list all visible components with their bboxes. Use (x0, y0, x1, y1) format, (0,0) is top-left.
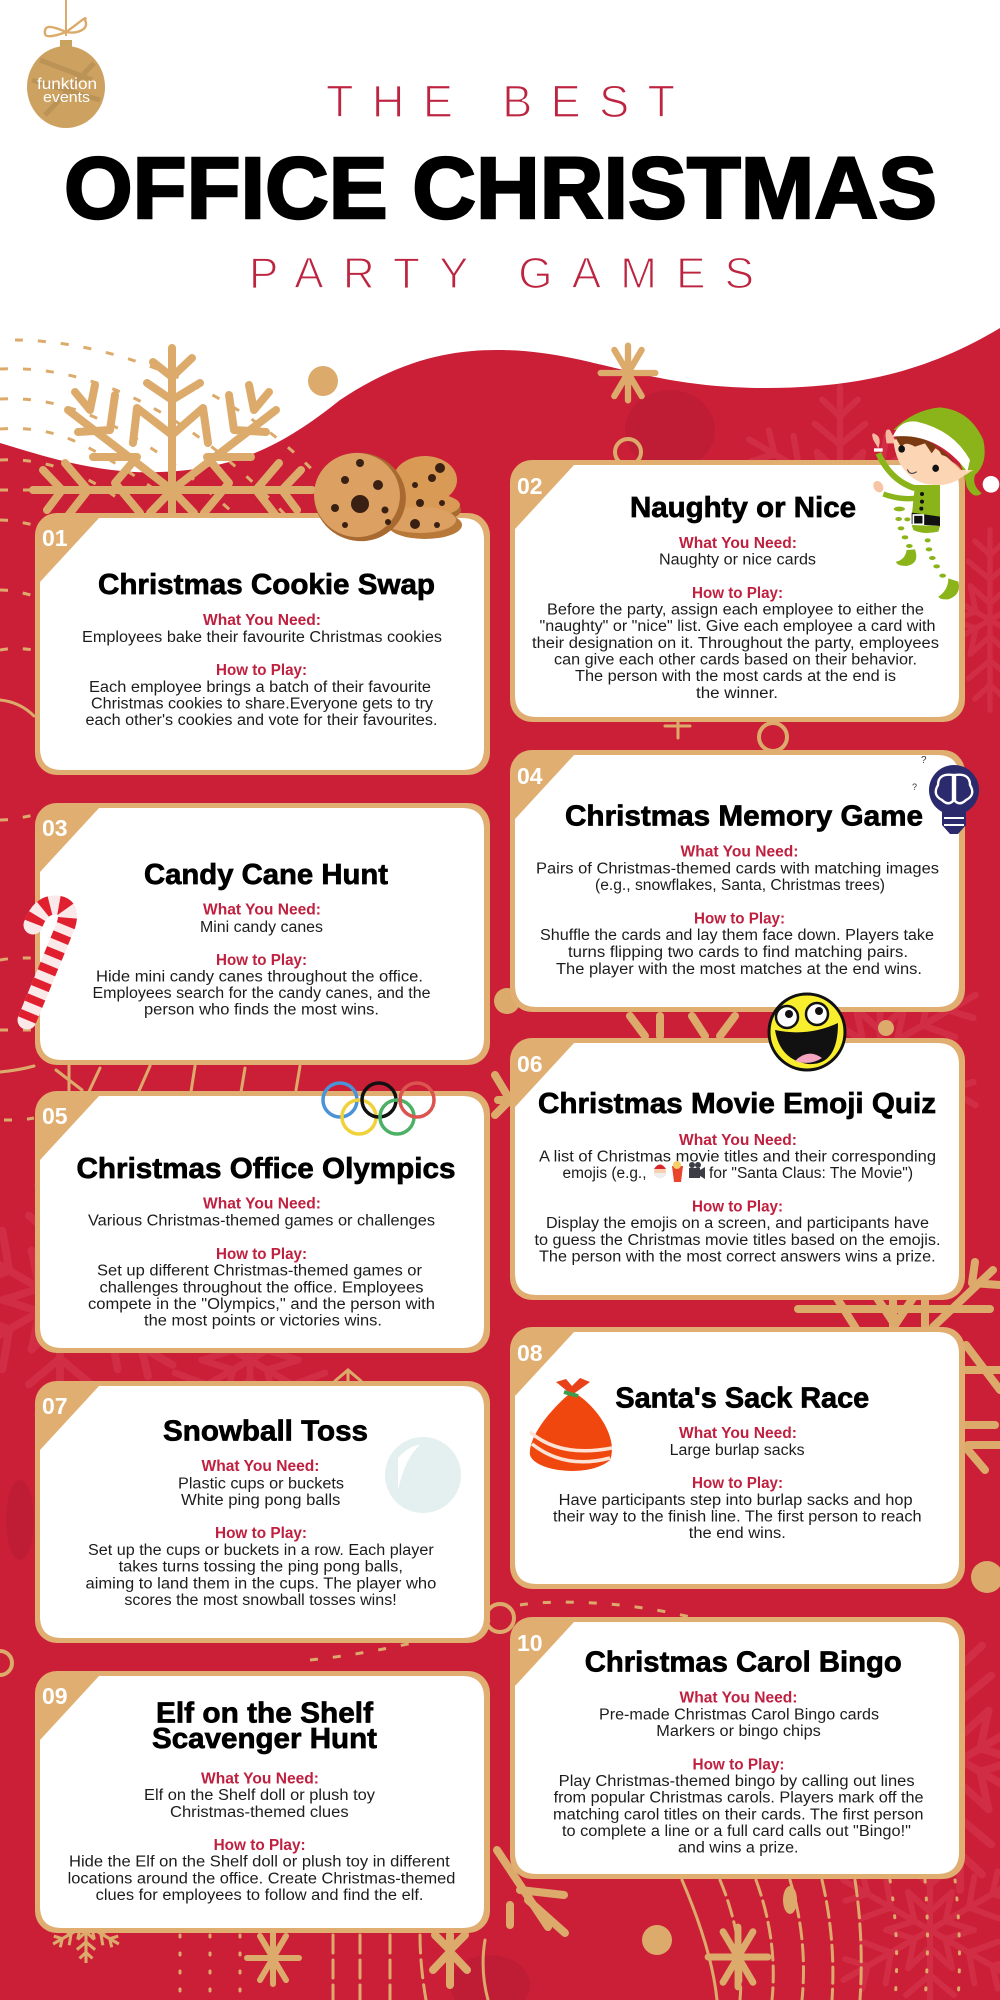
panel: 02 Naughty or Nice: can give each other cards based on their behavior. (554, 652, 917, 668)
panel: 02 Naughty or Nice: How to Play: (692, 585, 783, 602)
panel: 08 Santa's Sack Race: Santa's Sack Race (615, 1383, 869, 1415)
panel: 02 Naughty or Nice: "naughty" or "nice" list. Give each employee a card with (540, 618, 936, 635)
panel: 05 Christmas Office Olympics: How to Play: (216, 1246, 307, 1263)
panel: 06 Christmas Movie Emoji Quiz: 06 (517, 1051, 543, 1077)
panel: 10 Christmas Carol Bingo: 10 (517, 1630, 543, 1656)
panel: 09 Elf on the Shelf Scavenger Hunt: 09 (42, 1683, 68, 1709)
icon: santa's sack (530, 1378, 612, 1471)
panel: 08 Santa's Sack Race: How to Play: (692, 1475, 783, 1492)
panel: 07 Snowball Toss: scores the most snowball tosses wins! (124, 1592, 397, 1609)
panel: 09 Elf on the Shelf Scavenger Hunt: What You Need: (201, 1770, 319, 1787)
panel: 04 Christmas Memory Game: The player with the most matches at the end wins. (556, 961, 922, 978)
icon: brain light bulb: ? (921, 755, 927, 766)
logo: bauble ornament: events (43, 89, 90, 106)
panel: 09 Elf on the Shelf Scavenger Hunt: Elf on the Shelf (156, 1698, 374, 1730)
panel: 04 Christmas Memory Game: turns flipping two cards to find matching pairs. (568, 944, 908, 961)
panel: 03 Candy Cane Hunt: Mini candy canes (200, 919, 323, 936)
panel: 04 Christmas Memory Game: What You Need: (680, 844, 798, 861)
panel: 10 Christmas Carol Bingo: How to Play: (692, 1756, 784, 1773)
panel: 02 Naughty or Nice (510, 460, 965, 722)
panel: 03 Candy Cane Hunt: Hide mini candy canes throughout the office. (96, 969, 423, 986)
panel: 01 Christmas Cookie Swap: Employees bake their favourite Christmas cookies (82, 629, 442, 646)
panel: 03 Candy Cane Hunt: What You Need: (203, 902, 321, 919)
panel: 02 Naughty or Nice: 02 (517, 473, 543, 499)
icon: awesome face (769, 994, 845, 1070)
panel: 04 Christmas Memory Game (510, 750, 965, 1012)
panel: 05 Christmas Office Olympics: Christmas Office Olympics (76, 1153, 456, 1185)
panel: 09 Elf on the Shelf Scavenger Hunt: Christmas-themed clues (170, 1804, 349, 1821)
panel: 06 Christmas Movie Emoji Quiz: Display the emojis on a screen, and participants have (546, 1215, 929, 1232)
icon: brain light bulb (912, 755, 979, 834)
panel: 05 Christmas Office Olympics: the most points or victories wins. (144, 1313, 382, 1330)
panel: 03 Candy Cane Hunt (35, 803, 490, 1065)
panel: 05 Christmas Office Olympics (35, 1091, 490, 1353)
panel: 04 Christmas Memory Game: (e.g., snowflakes, Santa, Christmas trees) (595, 877, 885, 894)
panel: 01 Christmas Cookie Swap: Christmas cookies to share.Everyone gets to try (91, 696, 433, 713)
icon: olympic rings (323, 1083, 434, 1134)
icon: snowball (385, 1437, 461, 1513)
panel: 01 Christmas Cookie Swap: Each employee brings a batch of their favourite (89, 679, 431, 696)
panel: 10 Christmas Carol Bingo: to complete a line or a full card calls out "Bingo!" (562, 1823, 911, 1840)
panel: 07 Snowball Toss: What You Need: (202, 1458, 320, 1475)
panel: 03 Candy Cane Hunt: Employees search for the candy canes, and the (92, 985, 430, 1002)
panel: 04 Christmas Memory Game: Christmas Memory Game (565, 801, 923, 833)
panel: 07 Snowball Toss: Set up the cups or buckets in a row. Each player (88, 1542, 434, 1559)
panel: 09 Elf on the Shelf Scavenger Hunt (35, 1671, 490, 1933)
panel: 05 Christmas Office Olympics: What You Need: (203, 1196, 321, 1213)
panel: 10 Christmas Carol Bingo: Play Christmas-themed bingo by calling out lines (559, 1773, 915, 1790)
panel: 03 Candy Cane Hunt: How to Play: (216, 952, 307, 969)
panel: 07 Snowball Toss: takes turns tossing the ping pong balls, (119, 1559, 403, 1576)
panel: 08 Santa's Sack Race: Large burlap sacks (670, 1442, 805, 1459)
title: the best: THE BEST (326, 76, 675, 127)
panel: 10 Christmas Carol Bingo: Christmas Carol Bingo (585, 1647, 902, 1679)
panel: 10 Christmas Carol Bingo: matching carol titles on their cards. The first person (553, 1806, 924, 1823)
panel: 04 Christmas Memory Game: 04 (517, 763, 543, 789)
icon: candy cane (27, 905, 68, 1020)
gold snowflake and arcs, bottom (49, 1850, 959, 2000)
panel: 08 Santa's Sack Race: What You Need: (679, 1425, 797, 1442)
panel: 05 Christmas Office Olympics: Set up different Christmas-themed games or (97, 1263, 422, 1280)
panel: 08 Santa's Sack Race: the end wins. (689, 1525, 786, 1542)
panel: 06 Christmas Movie Emoji Quiz: to guess the Christmas movie titles based on the emojis. (534, 1232, 940, 1249)
panel: 10 Christmas Carol Bingo: from popular Christmas carols. Players mark off the (554, 1790, 924, 1807)
panel: 10 Christmas Carol Bingo: What You Need: (680, 1689, 798, 1706)
panel: 10 Christmas Carol Bingo: Pre-made Christmas Carol Bingo cards (599, 1706, 879, 1723)
panel: 09 Elf on the Shelf Scavenger Hunt: locations around the office. Create Christmas-themed (68, 1870, 455, 1887)
panel: 03 Candy Cane Hunt: Candy Cane Hunt (144, 859, 389, 891)
logo: bauble ornament: funktion (37, 76, 97, 93)
panel: 09 Elf on the Shelf Scavenger Hunt: Hide the Elf on the Shelf doll or plush toy in different (69, 1854, 450, 1871)
panel: 01 Christmas Cookie Swap: each other's cookies and vote for their favourites. (86, 712, 438, 729)
panel: 01 Christmas Cookie Swap: 01 (42, 525, 68, 551)
panel: 06 Christmas Movie Emoji Quiz: How to Play: (692, 1199, 783, 1216)
panel: 07 Snowball Toss: Snowball Toss (163, 1416, 368, 1448)
gold rings and circles, middle (0, 722, 1000, 1675)
dashed garland arcs, top left (0, 340, 340, 1120)
panel: 09 Elf on the Shelf Scavenger Hunt: Elf on the Shelf doll or plush toy (144, 1787, 375, 1804)
panel: 08 Santa's Sack Race: their way to the finish line. The first person to reach (553, 1509, 922, 1526)
panel: 01 Christmas Cookie Swap: Christmas Cookie Swap (98, 569, 435, 601)
panel: 02 Naughty or Nice: What You Need: (679, 535, 797, 552)
panel: 07 Snowball Toss: aiming to land them in the cups. The player who (86, 1575, 436, 1592)
panel: 05 Christmas Office Olympics: Various Christmas-themed games or challenges (88, 1213, 435, 1230)
panel: 04 Christmas Memory Game: Pairs of Christmas-themed cards with matching images (536, 860, 939, 878)
panel: 02 Naughty or Nice: The person with the most cards at the end is (575, 668, 896, 685)
gold snowflake, right side (798, 1262, 1000, 1470)
panel: 05 Christmas Office Olympics: challenges throughout the office. Employees (100, 1279, 424, 1296)
title: office christmas: OFFICE CHRISTMAS (64, 140, 937, 237)
panel: 07 Snowball Toss: White ping pong balls (181, 1492, 341, 1509)
logo: bauble ornament (27, 0, 105, 128)
panel: 02 Naughty or Nice: Naughty or nice cards (659, 552, 816, 568)
panel: 01 Christmas Cookie Swap: How to Play: (216, 662, 307, 679)
panel: 02 Naughty or Nice: their designation on it. Throughout the party, employees (532, 635, 939, 652)
panel: 04 Christmas Memory Game: How to Play: (694, 911, 785, 928)
panel: 08 Santa's Sack Race: 08 (517, 1340, 543, 1366)
gold circle and star, top (308, 346, 655, 465)
panel: 04 Christmas Memory Game: Shuffle the cards and lay them face down. Players take (540, 927, 934, 944)
panel: 08 Santa's Sack Race: Have participants step into burlap sacks and hop (559, 1492, 913, 1509)
panel: 07 Snowball Toss: Plastic cups or buckets (178, 1475, 344, 1492)
panel: 05 Christmas Office Olympics: 05 (42, 1103, 68, 1129)
panel: 02 Naughty or Nice: Before the party, assign each employee to either the (547, 602, 924, 619)
panel: 03 Candy Cane Hunt: 03 (42, 815, 68, 841)
panel: 09 Elf on the Shelf Scavenger Hunt: How to Play: (214, 1837, 306, 1854)
panel: 10 Christmas Carol Bingo: and wins a prize. (678, 1840, 798, 1857)
panel: 02 Naughty or Nice: the winner. (696, 685, 778, 702)
panel: 07 Snowball Toss (35, 1381, 490, 1643)
panel: 10 Christmas Carol Bingo: Markers or bingo chips (656, 1723, 821, 1740)
panel: 06 Christmas Movie Emoji Quiz: for "Santa Claus: The Movie") (709, 1165, 913, 1182)
panel: 08 Santa's Sack Race (510, 1327, 965, 1589)
panel: 06 Christmas Movie Emoji Quiz: A list of Christmas movie titles and their corresponding (539, 1149, 936, 1166)
panel: 05 Christmas Office Olympics: compete in the "Olympics," and the person with (88, 1296, 435, 1313)
snowflake: large gold, top left (33, 348, 312, 517)
panel: 02 Naughty or Nice: Naughty or Nice (630, 492, 856, 524)
panel: 06 Christmas Movie Emoji Quiz: The person with the most correct answers wins a prize. (539, 1249, 936, 1266)
icon: brain light bulb: ? (912, 782, 917, 792)
panel: 06 Christmas Movie Emoji Quiz: Christmas Movie Emoji Quiz (538, 1088, 936, 1120)
panel: 03 Candy Cane Hunt: person who finds the most wins. (144, 1002, 379, 1019)
panel: 06 Christmas Movie Emoji Quiz: What You Need: (679, 1132, 797, 1149)
icons: santa, popcorn, movie camera emojis (654, 1161, 705, 1182)
panel: 06 Christmas Movie Emoji Quiz (510, 1038, 965, 1300)
panel: 10 Christmas Carol Bingo (510, 1617, 965, 1879)
panel: 07 Snowball Toss: 07 (42, 1393, 68, 1419)
icon: cookies (304, 443, 462, 551)
panel: 01 Christmas Cookie Swap (35, 513, 490, 775)
panel: 09 Elf on the Shelf Scavenger Hunt: clues for employees to follow and find the elf. (96, 1887, 423, 1904)
panel: 09 Elf on the Shelf Scavenger Hunt: Scavenger Hunt (152, 1723, 378, 1755)
icon: elf (871, 407, 999, 599)
title: party games: PARTY GAMES (249, 249, 754, 298)
panel: 01 Christmas Cookie Swap: What You Need: (203, 612, 321, 629)
panel: 06 Christmas Movie Emoji Quiz: emojis (e.g., (562, 1165, 646, 1182)
panel: 07 Snowball Toss: How to Play: (215, 1525, 307, 1542)
